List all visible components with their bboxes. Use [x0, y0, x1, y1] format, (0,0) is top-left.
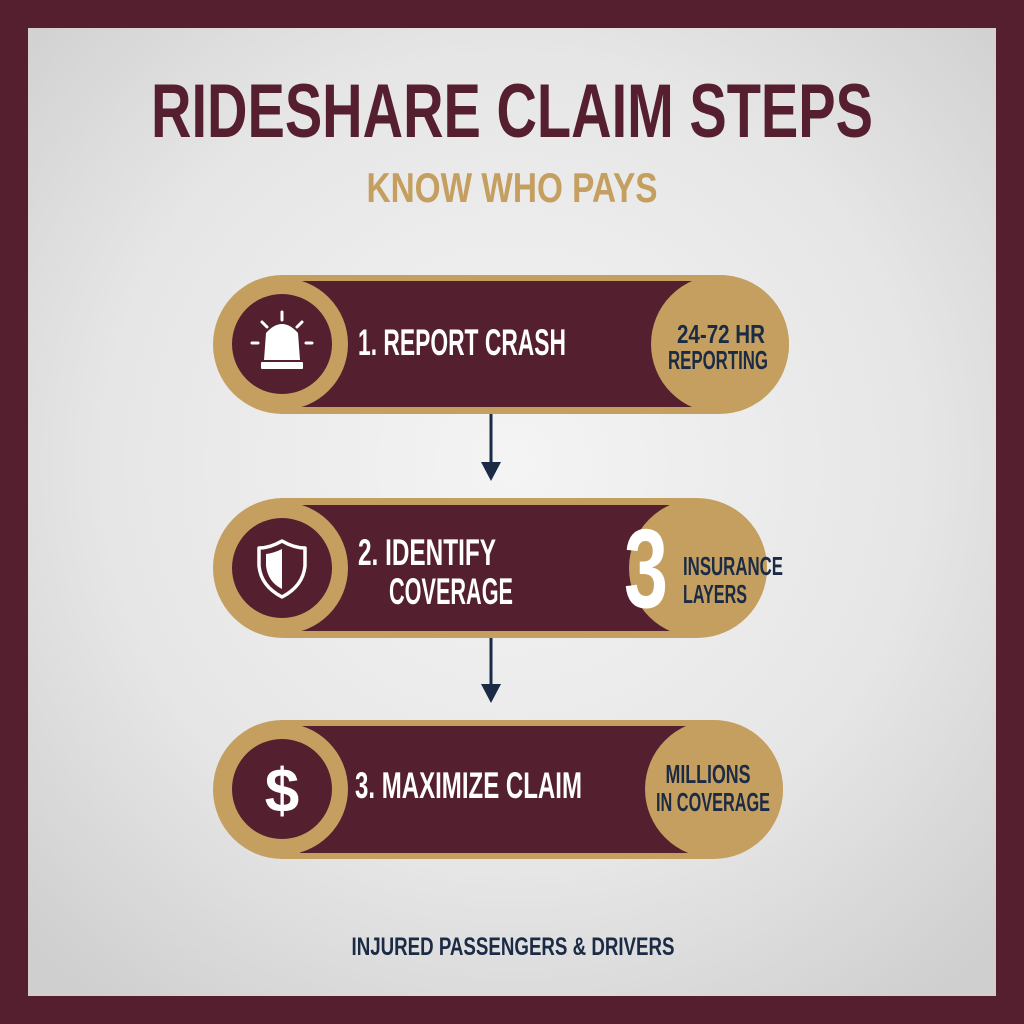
step 3: maximize claim	[213, 720, 783, 859]
arrow 2	[481, 638, 501, 703]
icon: siren	[252, 312, 312, 369]
step 1: report crash: REPORTING	[668, 345, 768, 375]
step 2: identify coverage	[213, 498, 783, 638]
step 1: report crash	[213, 275, 789, 414]
icon: dollar: $	[265, 757, 299, 826]
step 2: identify coverage: COVERAGE	[389, 571, 513, 612]
icon: shield	[259, 541, 305, 597]
arrow 1	[481, 414, 501, 481]
step 2: identify coverage: INSURANCE	[683, 551, 783, 581]
step 2: identify coverage: 3	[624, 506, 668, 631]
step 1: report crash: 1. REPORT CRASH	[358, 322, 566, 363]
step 2: identify coverage: 2. IDENTIFY	[358, 532, 496, 573]
step 2: identify coverage: LAYERS	[683, 579, 747, 609]
step 3: maximize claim: 3. MAXIMIZE CLAIM	[355, 765, 582, 806]
footer: INJURED PASSENGERS & DRIVERS	[352, 933, 674, 961]
step 3: maximize claim: MILLIONS	[666, 759, 750, 789]
subtitle: KNOW WHO PAYS	[366, 164, 658, 211]
step 3: maximize claim: IN COVERAGE	[656, 787, 770, 817]
step 1: report crash: 24-72 HR	[677, 319, 765, 349]
